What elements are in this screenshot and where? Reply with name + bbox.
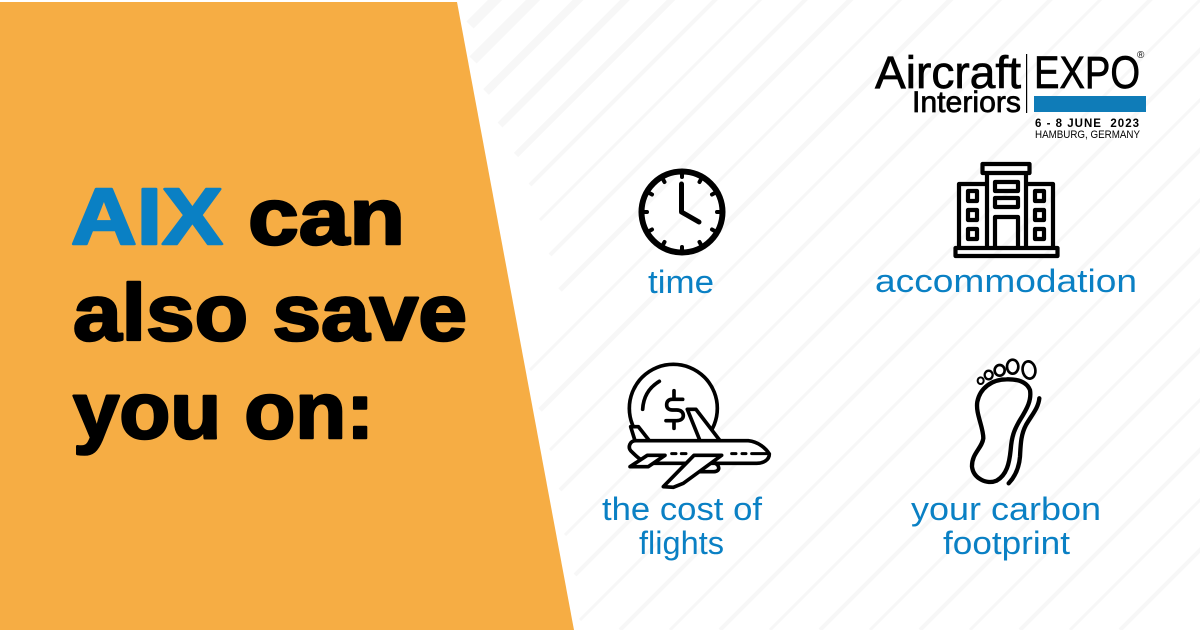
heading: AIX can also save you on (71, 172, 467, 455)
label: your carbon footprint (911, 491, 1101, 561)
logo: Aircraft Interiors EXPO: 6 - 8 JUNE 2023 (1035, 118, 1139, 130)
logo: Aircraft Interiors EXPO (875, 47, 1146, 141)
icon: clock (642, 172, 722, 252)
logo: Aircraft Interiors EXPO: HAMBURG, GERMANY (1035, 129, 1141, 141)
icon: plane and dollar coin (629, 364, 769, 487)
logo: Aircraft Interiors EXPO: Interiors (912, 86, 1021, 119)
logo: Aircraft Interiors EXPO: EXPO (1034, 47, 1140, 98)
label: time: time (648, 264, 714, 300)
logo: Aircraft Interiors EXPO: Aircraft (875, 47, 1022, 98)
label: your carbon footprint: your carbon (911, 491, 1101, 527)
panel: orange headline panel (0, 2, 574, 630)
logo: Aircraft Interiors EXPO: ® (1137, 50, 1145, 61)
icon: footprint (972, 360, 1039, 483)
heading: AIX can also save you on: you on: (73, 366, 374, 455)
heading: AIX can also save you on: also save (73, 268, 467, 357)
label: your carbon footprint: footprint (943, 525, 1070, 561)
label: the cost of flights: the cost of (602, 491, 762, 527)
label: the cost of flights: flights (639, 525, 724, 561)
icon: hotel building (956, 164, 1058, 256)
label: accommodation: accommodation (875, 263, 1137, 299)
label: the cost of flights (602, 491, 762, 561)
heading: AIX can also save you on: AIX can (71, 172, 405, 261)
